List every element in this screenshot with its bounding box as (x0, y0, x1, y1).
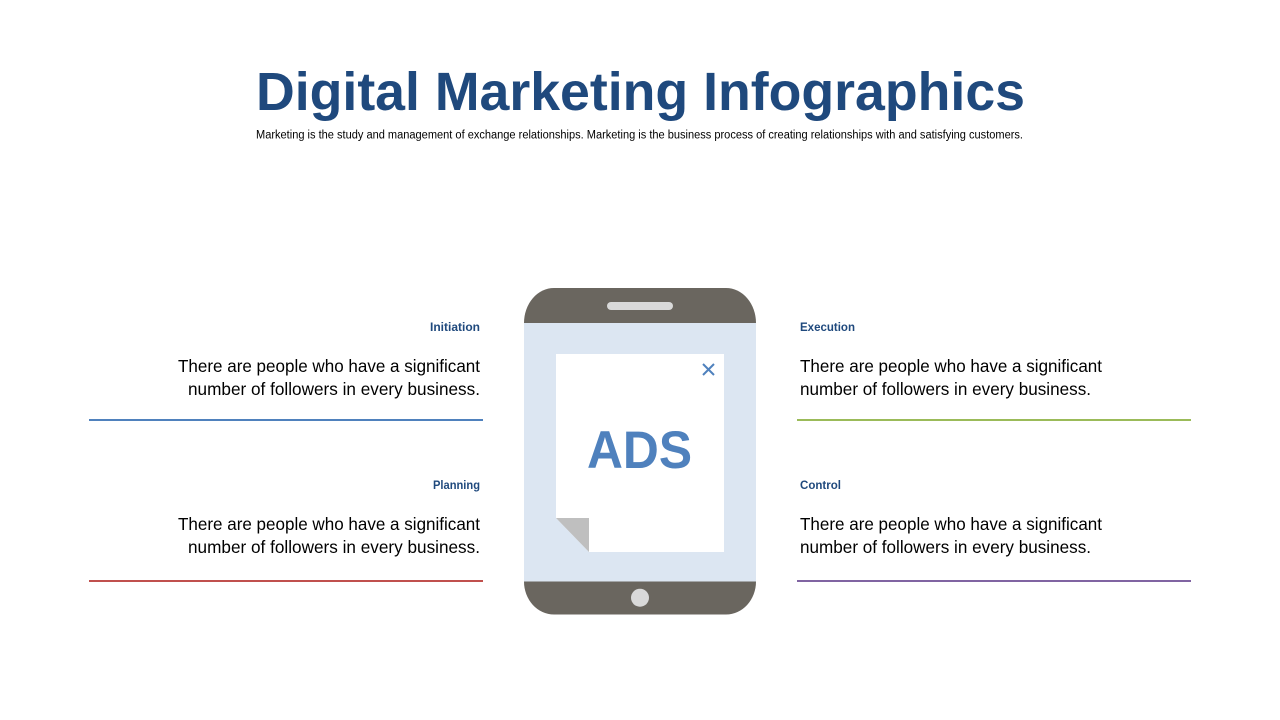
text block: control (800, 514, 1102, 557)
heading: initiation: Initiation (430, 322, 480, 334)
phone home button (631, 589, 649, 607)
icon: smartphone with ad (524, 288, 756, 614)
paper fold (556, 518, 589, 552)
subtitle: Marketing is the study and management of exchange relationships. Marketing is the business process of creating relationships with and satisfying customers. (256, 130, 1023, 142)
text block: initiation: number of followers in every business. (188, 379, 480, 399)
ad paper (556, 354, 724, 552)
text block: control: number of followers in every business. (800, 537, 1091, 557)
phone screen (524, 323, 756, 582)
text block: control: There are people who have a significant (800, 514, 1102, 534)
heading: planning: Planning (433, 480, 480, 492)
phone speaker (607, 302, 673, 310)
heading: control: Control (800, 480, 841, 492)
heading: execution: Execution (800, 322, 855, 334)
text block: planning (178, 514, 480, 557)
panel: initiation (89, 322, 483, 421)
ads label: ADS (587, 421, 692, 480)
close icon (703, 364, 714, 375)
text block: planning: There are people who have a significant (178, 514, 480, 534)
phone bottom bezel (524, 582, 756, 614)
text block: execution: number of followers in every business. (800, 379, 1091, 399)
panel: control (797, 480, 1191, 582)
text block: initiation (178, 356, 480, 399)
panel: planning (89, 480, 483, 582)
text block: execution: There are people who have a significant (800, 356, 1102, 376)
panel: execution (797, 322, 1191, 421)
text block: initiation: There are people who have a significant (178, 356, 480, 376)
text block: execution (800, 356, 1102, 399)
phone top bezel (524, 288, 756, 323)
text block: planning: number of followers in every business. (188, 537, 480, 557)
title: Digital Marketing Infographics (256, 62, 1025, 122)
